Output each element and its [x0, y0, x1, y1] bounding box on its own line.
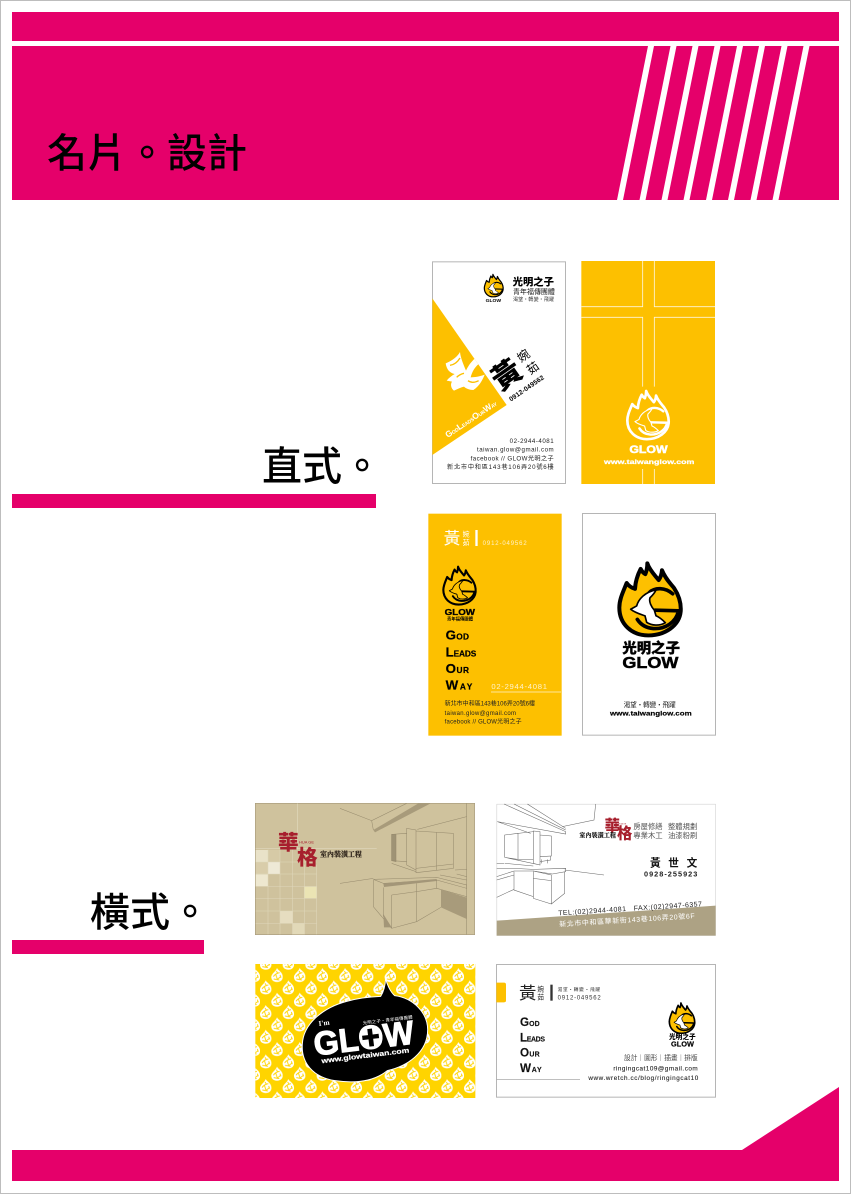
contact details: taiwan.glow@gmail.com	[477, 447, 554, 454]
services: 專業木工	[633, 831, 663, 840]
acronym: WAY	[446, 678, 473, 693]
title: 名片。設計	[47, 121, 247, 179]
card: horizontal white with kitchen: 0928-255923	[644, 870, 697, 879]
logo	[443, 567, 476, 605]
card: vertical white logo: 光明之子	[622, 637, 680, 658]
card: vertical white front: 茹	[523, 357, 542, 378]
contact details: facebook // GLOW光明之子	[445, 718, 522, 726]
footer band	[12, 1087, 839, 1181]
acronym	[520, 1016, 545, 1075]
top strip	[12, 12, 839, 41]
card: horizontal tan with kitchen	[255, 803, 475, 935]
card: horizontal white name: 茹	[537, 992, 544, 1002]
speech bubble	[302, 978, 428, 1082]
contact details	[445, 700, 535, 726]
yellow triangle	[432, 298, 507, 455]
card: vertical white logo	[582, 513, 715, 735]
contact details: 02-2944-4081	[510, 438, 554, 445]
logo	[484, 274, 503, 297]
acronym: LEADS	[520, 1031, 545, 1044]
services	[633, 822, 697, 840]
contact details	[447, 438, 554, 471]
contact details: facebook // GLOW光明之子	[471, 454, 554, 462]
tel and address: TEL:(02)2944-4081 FAX:(02)2947-6357	[558, 901, 702, 917]
card: vertical white front	[432, 262, 565, 483]
section heading: vertical	[12, 434, 382, 508]
bubble text: 光明之子・青年福傳團體	[362, 1013, 414, 1027]
card: horizontal white with kitchen: 室內裝潢工程	[579, 832, 616, 840]
card: vertical white logo: www.taiwanglow.com	[609, 711, 692, 718]
section heading: vertical: 直式。	[262, 434, 382, 492]
cross lines	[581, 261, 715, 484]
brand mark	[278, 825, 362, 871]
contact details: 新北市中和區143巷106弄20號6樓	[445, 700, 535, 708]
services and contact: 設計｜圖形｜插畫｜排版	[624, 1052, 698, 1062]
dove emblem on triangle	[446, 352, 485, 391]
card: vertical white logo: GLOW	[622, 655, 679, 672]
card: vertical yellow with name: 0912-049562	[483, 541, 527, 547]
contact details: 新北市中和區143巷106弄20號6樓	[447, 463, 554, 471]
services and contact: ringingcat109@gmail.com	[613, 1066, 698, 1073]
card: vertical yellow with name: 婉	[463, 529, 470, 539]
card: horizontal white with kitchen: 新北市中和區華新街143巷106弄20號6F	[559, 911, 695, 929]
name: 黃	[519, 979, 536, 1004]
card: vertical white front: 青年福傳團體	[513, 287, 555, 297]
acronym: GOD	[446, 628, 469, 643]
taupe band	[497, 906, 716, 936]
services: 油漆粉刷	[668, 831, 697, 840]
card: horizontal white name: 渴望・轉變・飛躍	[558, 986, 600, 993]
kitchen drawing: tan card	[340, 803, 467, 934]
main banner with stripes	[12, 46, 839, 200]
brand mark: HUA GE	[299, 840, 314, 845]
acronym: WAY	[520, 1062, 542, 1075]
services: 整體規劃	[668, 822, 697, 831]
section heading: horizontal: 橫式。	[90, 880, 210, 938]
phone: 02-2944-4081	[491, 682, 547, 691]
yellow tab	[496, 983, 506, 1002]
acronym: GOD	[520, 1016, 540, 1029]
card: vertical yellow back: GLOW	[629, 444, 669, 456]
card: vertical white front: 0912-049562	[508, 374, 546, 403]
card: horizontal white name: GLOW	[671, 1042, 694, 1049]
acronym: LEADS	[446, 645, 477, 660]
contact name: 黃世文	[650, 856, 705, 871]
card: horizontal white with kitchen	[497, 804, 716, 936]
tile grid	[256, 803, 377, 934]
white logo	[627, 391, 669, 439]
brand mark: 格	[297, 841, 318, 871]
acronym: OUR	[446, 661, 469, 676]
card: vertical yellow with name: 青年福傳團體	[447, 616, 474, 623]
organisation name: 光明之子	[513, 274, 554, 289]
big logo	[619, 563, 681, 635]
rotated tagline: GODLEADSOURWAY	[443, 398, 499, 440]
rotated name: 黃	[481, 348, 530, 399]
card: vertical yellow with name	[428, 514, 562, 736]
bubble text: GLOW	[312, 1015, 417, 1064]
name: 黃	[444, 525, 460, 549]
kitchen drawing: white card	[497, 804, 604, 904]
services: 房屋修繕	[633, 822, 663, 831]
section heading: horizontal	[12, 880, 210, 954]
card: vertical white logo: 渴望・轉變・飛躍	[624, 699, 676, 709]
card: horizontal white name: 0912-049562	[558, 995, 601, 1001]
card: vertical white front: 渴望・轉變・飛躍	[513, 296, 554, 303]
brand mark: 室內裝潢工程	[320, 849, 362, 858]
card: vertical yellow with name: 茹	[463, 538, 470, 548]
card: horizontal white name: 光明之子	[669, 1031, 696, 1041]
contact details: taiwan.glow@gmail.com	[445, 711, 516, 717]
card: horizontal white name: 婉	[537, 983, 544, 993]
logo	[669, 1003, 695, 1033]
header banner	[12, 12, 839, 200]
acronym	[446, 628, 477, 693]
bubble text: I'm	[318, 1018, 330, 1028]
acronym: OUR	[520, 1047, 540, 1060]
card: horizontal white name	[496, 964, 715, 1097]
bubble text: www.glowtaiwan.com	[320, 1048, 410, 1065]
services and contact	[587, 1052, 699, 1082]
card: vertical yellow with name: GLOW	[445, 607, 476, 617]
brand mark: 華	[605, 814, 620, 836]
brand mark: 華	[278, 825, 299, 855]
card: vertical white front: 婉	[514, 345, 533, 366]
card: vertical yellow back: www.taiwanglow.com	[603, 459, 694, 466]
services and contact: www.wretch.cc/blog/ringingcat10	[587, 1075, 699, 1082]
card: vertical white front: GLOW	[486, 298, 501, 304]
card: vertical yellow back	[581, 261, 715, 484]
card: horizontal white with kitchen: 格	[617, 822, 633, 844]
card: horizontal yellow GLOW pattern	[255, 964, 475, 1098]
card: horizontal white with kitchen: HUA GE	[619, 823, 627, 826]
